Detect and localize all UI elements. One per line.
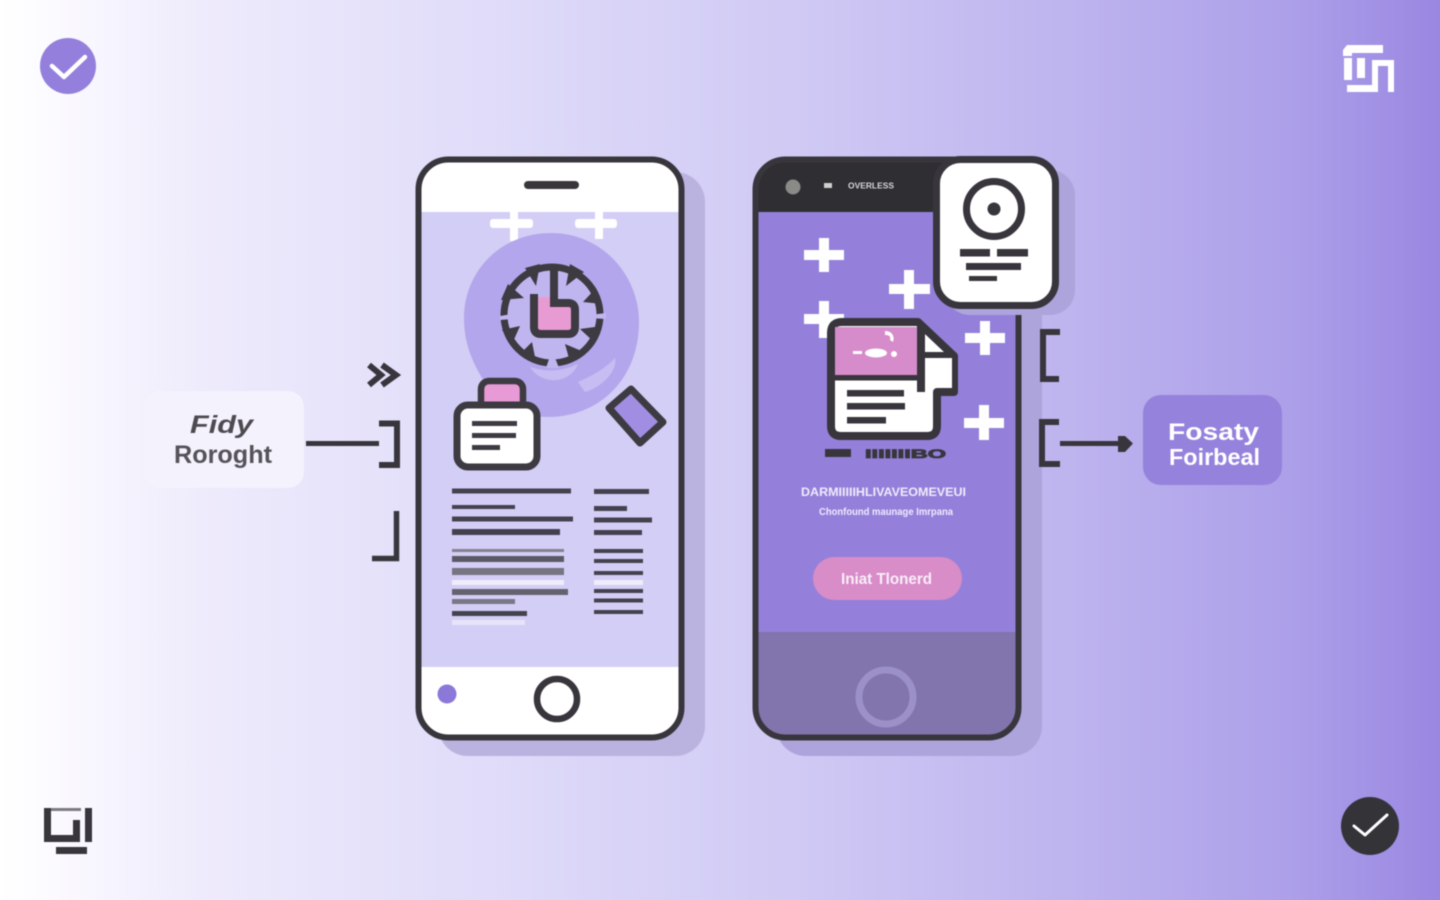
right label box xyxy=(1143,395,1282,485)
description text: DARMIIIIIHLIVAVEOMEVEUI xyxy=(801,487,966,499)
description text: Chonfound maunage Imrpana xyxy=(819,507,953,518)
diamond icon xyxy=(609,389,663,443)
icon: dark logo bottom left xyxy=(44,808,92,854)
left phone xyxy=(418,160,705,756)
left label box: Roroght xyxy=(174,441,273,469)
chevron arrow xyxy=(369,365,396,385)
right phone status icon xyxy=(824,183,832,188)
right bracket upper xyxy=(1043,332,1060,379)
right phone xyxy=(756,160,1075,756)
icon: white logo top right xyxy=(1343,45,1394,92)
left phone frame xyxy=(418,160,682,738)
plus icons xyxy=(804,238,1005,440)
left label box xyxy=(144,391,304,488)
left phone home button xyxy=(537,679,577,719)
left phone speaker notch xyxy=(524,181,579,189)
magnifier blob xyxy=(464,233,639,417)
left phone menu dot xyxy=(438,684,456,704)
right phone frame xyxy=(756,160,1018,738)
profile card xyxy=(936,160,1075,315)
left text column xyxy=(452,488,573,625)
right label box: Fosaty xyxy=(1168,419,1260,446)
connector line from left label xyxy=(306,441,379,446)
right phone screen xyxy=(756,160,1018,737)
right phone status dot xyxy=(786,180,800,194)
icon: dark check badge xyxy=(1341,797,1399,855)
left phone screen xyxy=(419,160,681,737)
gear clock icon xyxy=(500,264,606,368)
right text column xyxy=(594,489,652,614)
description text xyxy=(801,487,966,518)
left phone shadow xyxy=(438,172,705,756)
document caption bars: IIIIIIIBO xyxy=(865,447,946,461)
right bracket lower xyxy=(1042,422,1060,464)
clipboard icon xyxy=(457,381,537,467)
left bracket lower xyxy=(372,511,396,558)
document caption bars xyxy=(825,447,946,461)
right label box: Foirbeal xyxy=(1169,444,1260,470)
pink call-to-action button: Iniat Tlonerd xyxy=(841,571,932,588)
plus marks at top of screen xyxy=(490,212,617,241)
right phone shadow xyxy=(776,172,1042,756)
blob highlights xyxy=(530,358,615,392)
left label box: Fidy xyxy=(190,411,254,439)
right phone status text: OVERLESS xyxy=(848,182,895,190)
right phone home button xyxy=(859,670,913,724)
icon: purple check badge xyxy=(40,38,96,94)
document icon xyxy=(831,322,954,436)
arrow to right label xyxy=(1060,436,1133,452)
pink call-to-action button xyxy=(813,557,962,600)
left bracket upper xyxy=(379,424,397,465)
